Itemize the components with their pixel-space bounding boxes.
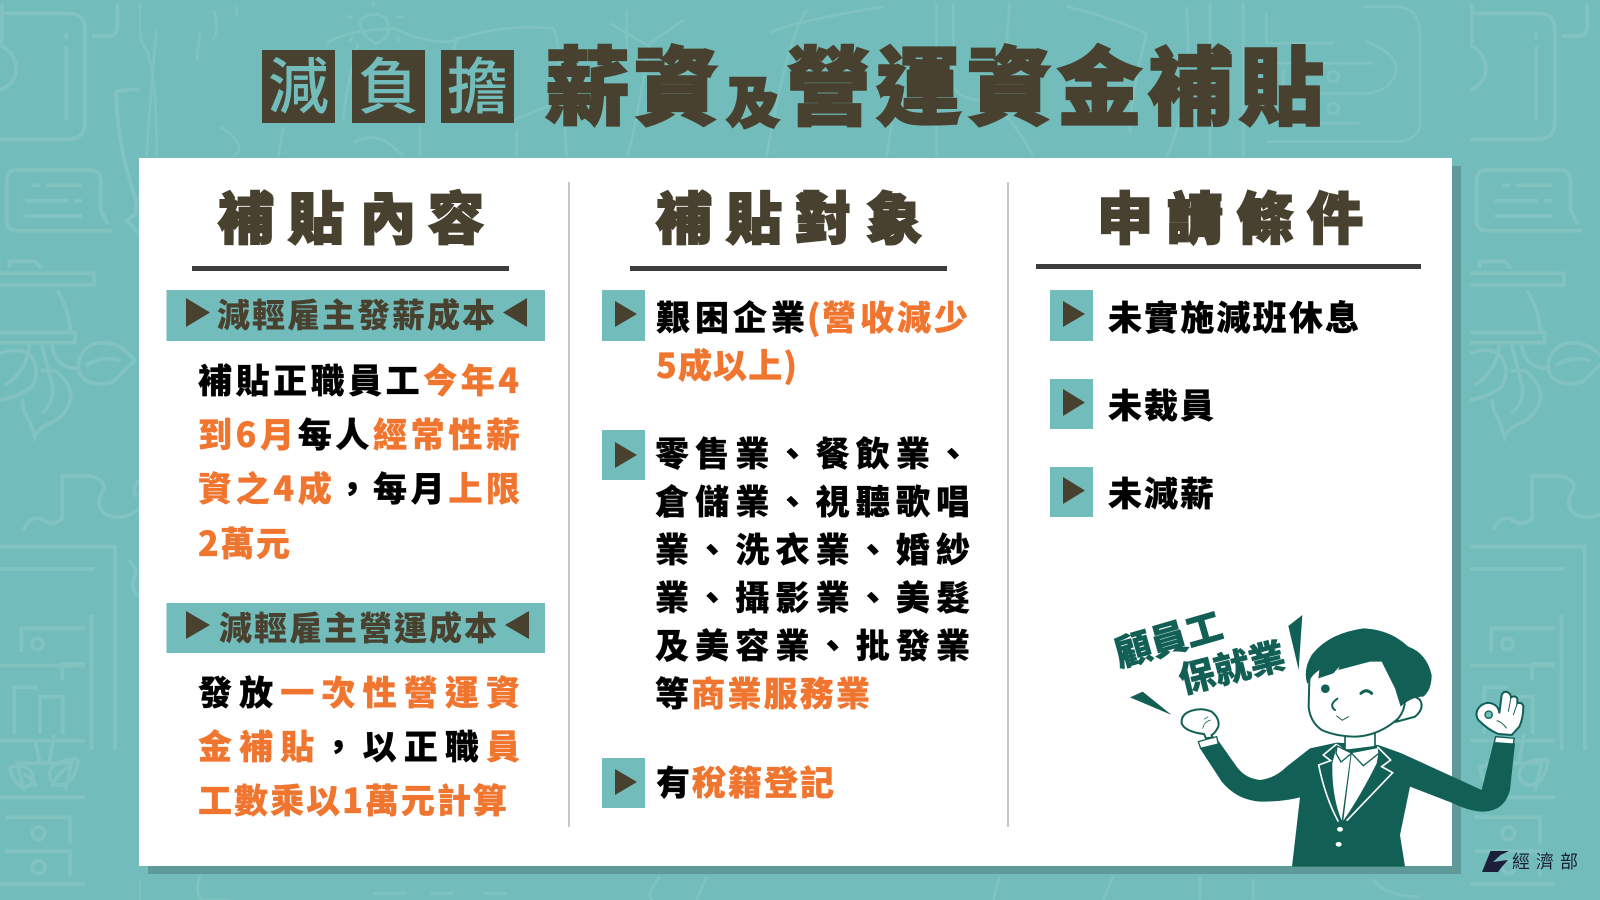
bullet: eligible industries [602,427,970,716]
panel: subsidy content [166,175,545,823]
banner: reduce operating cost [166,602,545,653]
title tag: 負: 負 [358,37,419,126]
bullet: eligible industries: 業、洗衣業、婚紗 [655,523,970,572]
bullet: eligible industries: 及美容業、批發業 [655,619,970,668]
bullet: tax registration: 有稅籍登記 [656,756,834,805]
text: payroll subsidy description: 資之4成，每月上限 [198,462,520,511]
panel: eligible recipients [602,175,970,808]
eyes, nose and mouth [1321,684,1372,720]
logo mark [1482,851,1509,872]
heading: 補貼對象: 補貼對象 [656,175,922,256]
exclamation marks [1130,615,1302,715]
text: payroll subsidy description: 到6月每人經常性薪 [198,408,520,457]
main white panel [139,158,1452,866]
heading rule [192,266,509,271]
slogan: 顧員工 保就業 [1107,596,1290,704]
condition: no pay cuts [1050,467,1214,517]
bullet: eligible industries: 倉儲業、視聽歌唱 [655,475,970,524]
title tag: 擔: 擔 [447,37,508,126]
text: operating subsidy description: 工數乘以1萬元計算 [198,774,507,823]
hair [1306,628,1432,707]
bullet: eligible industries: 零售業、餐飲業、 [655,427,970,476]
text: operating subsidy description: 金補貼，以正職員 [198,720,520,769]
panel shadow [148,166,1461,874]
banner: reduce payroll cost [166,289,545,341]
bullet: eligible industries: 業、攝影業、美髮 [655,571,970,620]
logo: Ministry of Economic Affairs [1482,848,1578,874]
condition: no pay cuts: 未減薪 [1108,467,1214,516]
lapel outlines [1319,744,1393,822]
bullet: struggling businesses: 艱困企業(營收減少 [656,291,968,340]
jacket buttons [1336,827,1343,847]
text: operating subsidy description: 發放一次性營運資 [198,666,520,715]
heading rule [630,266,947,271]
title tag: 減: 減 [268,37,329,126]
column divider right [1007,182,1009,827]
face [1309,657,1405,737]
heading: 申請條件: 申請條件 [1097,175,1363,256]
neck [1345,733,1375,750]
banner: reduce operating cost: 減輕雇主營運成本 [219,602,497,650]
ear [1397,697,1422,722]
slogan: 顧員工 保就業: 保就業 [1173,627,1290,704]
heading: 補貼內容: 補貼內容 [218,175,484,256]
panel: application conditions [1036,175,1421,517]
left fist and cuff [1182,709,1219,748]
condition: no layoffs: 未裁員 [1108,379,1214,428]
column divider left [568,182,570,827]
main title: 薪資 [545,20,719,143]
main title [545,20,1324,143]
text: payroll subsidy description: 補貼正職員工今年4 [198,354,519,403]
bullet: eligible industries: 等商業服務業 [655,667,870,716]
bullet: struggling businesses [602,290,968,388]
text: payroll subsidy description [198,354,520,566]
main title: 及 [726,59,780,138]
heading rule [1036,264,1421,269]
condition: no layoffs [1050,379,1214,429]
condition: no furlough: 未實施減班休息 [1108,291,1359,340]
jacket [1199,737,1515,867]
slogan: 顧員工 保就業: 顧員工 [1107,596,1228,678]
character: businessman with slogan [1107,596,1523,867]
logo text: 經濟部 [1512,848,1578,874]
right OK hand and cuff [1476,692,1523,744]
text: operating subsidy description [198,666,520,823]
banner: reduce payroll cost: 減輕雇主發薪成本 [217,289,495,337]
main title: 營運資金補貼 [786,20,1324,143]
text: payroll subsidy description: 2萬元 [198,517,290,566]
shirt and collar [1332,744,1378,821]
bullet: struggling businesses: 5成以上) [656,339,797,388]
